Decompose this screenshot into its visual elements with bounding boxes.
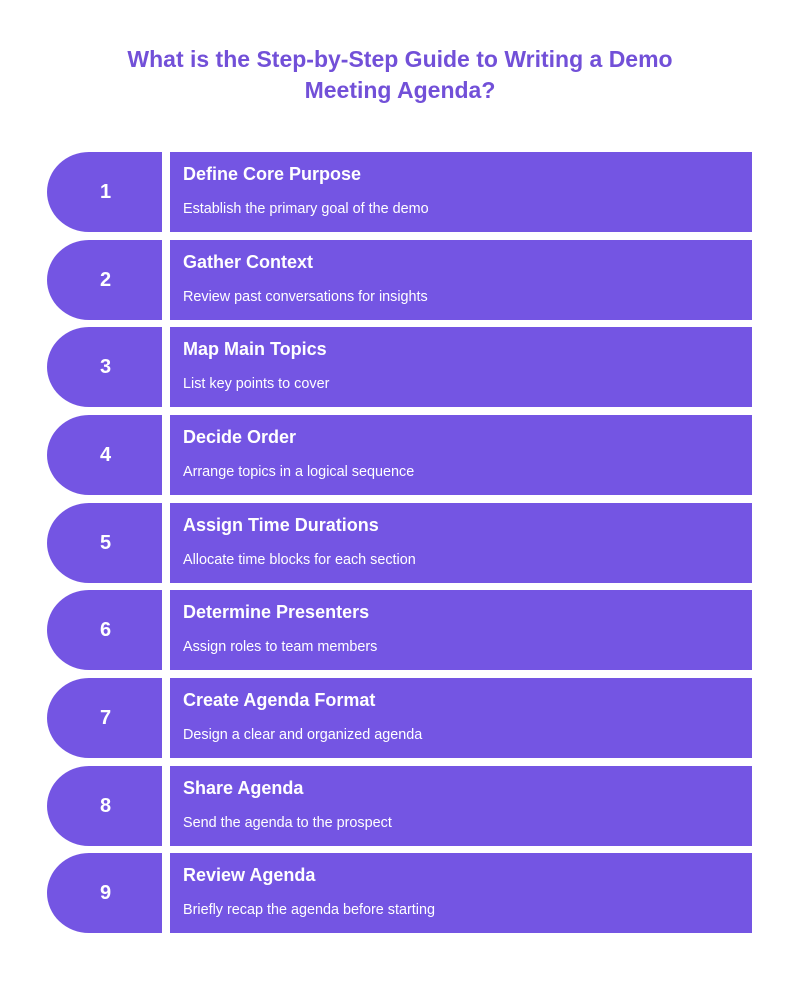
title: What is the Step-by-Step Guide to Writing a Demo <box>127 46 673 72</box>
step 1: Define Core Purpose <box>183 164 361 184</box>
step 9: Briefly recap the agenda before starting <box>183 902 435 918</box>
step 3: List key points to cover <box>183 376 329 392</box>
step 6: 6 <box>100 619 111 641</box>
step 5: Assign Time Durations <box>183 515 379 535</box>
step 8: Send the agenda to the prospect <box>183 815 392 831</box>
step 2 <box>47 240 752 320</box>
step 9: 9 <box>100 882 111 904</box>
step 4: Arrange topics in a logical sequence <box>183 464 414 480</box>
step 7 <box>47 678 752 758</box>
step 5: Allocate time blocks for each section <box>183 552 416 568</box>
step 4 <box>47 415 752 495</box>
step 4: 4 <box>100 444 111 466</box>
step 9: Review Agenda <box>183 865 315 885</box>
step 5 <box>47 503 752 583</box>
step 2: 2 <box>100 269 111 291</box>
step 3 <box>47 327 752 407</box>
step 3: Map Main Topics <box>183 339 327 359</box>
step 8: Share Agenda <box>183 778 303 798</box>
step 7: Design a clear and organized agenda <box>183 727 422 743</box>
step 1: Establish the primary goal of the demo <box>183 201 429 217</box>
title: Meeting Agenda? <box>305 77 495 103</box>
step 9 <box>47 853 752 933</box>
step 6 <box>47 590 752 670</box>
step 8 <box>47 766 752 846</box>
step 1: 1 <box>100 181 111 203</box>
step 4: Decide Order <box>183 427 296 447</box>
step 5: 5 <box>100 532 111 554</box>
title <box>127 46 673 103</box>
step 2: Gather Context <box>183 252 313 272</box>
step 7: 7 <box>100 707 111 729</box>
step 2: Review past conversations for insights <box>183 289 428 305</box>
step 6: Assign roles to team members <box>183 639 377 655</box>
step 3: 3 <box>100 356 111 378</box>
step 7: Create Agenda Format <box>183 690 375 710</box>
step 8: 8 <box>100 795 111 817</box>
step 6: Determine Presenters <box>183 602 369 622</box>
step 1 <box>47 152 752 232</box>
